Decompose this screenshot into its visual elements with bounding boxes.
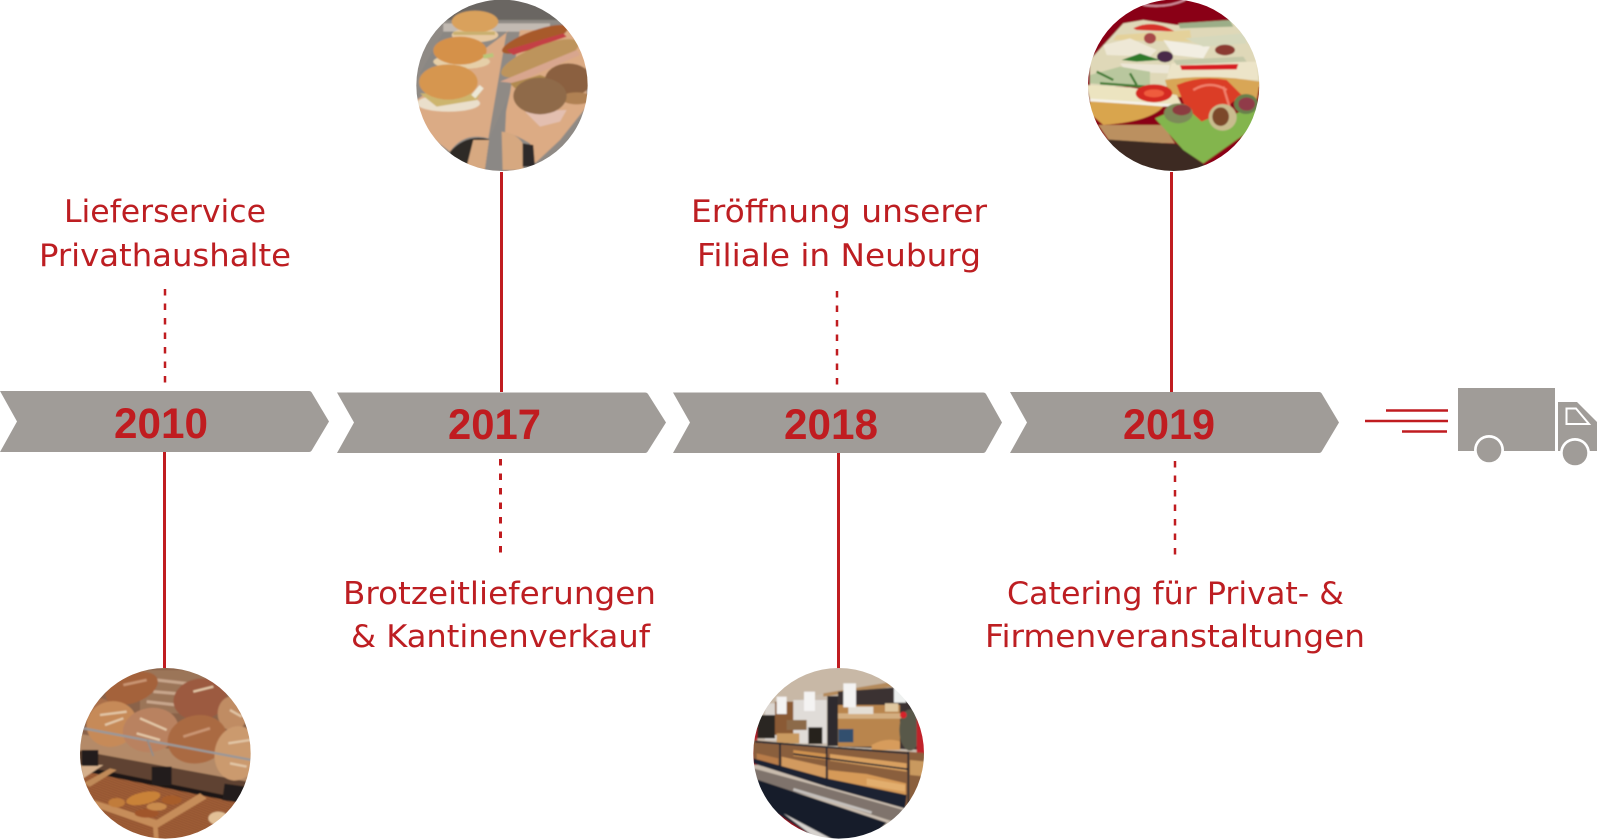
front wheel xyxy=(1560,438,1590,468)
text: Lieferservice Privathaushalte xyxy=(39,194,291,274)
connector: 2017 photo line xyxy=(500,172,503,392)
milestone arrow 2019 xyxy=(1010,392,1339,453)
truck cab xyxy=(1558,402,1597,451)
photo: bakery shop counter xyxy=(750,667,930,839)
milestone arrow 2019: 2019 xyxy=(1123,401,1215,449)
connector: 2010 dashed line xyxy=(164,289,166,385)
text: Catering für Privat- & Firmenveranstaltungen xyxy=(985,576,1365,655)
milestone arrow 2010: 2010 xyxy=(114,400,208,448)
milestone arrow 2017: 2017 xyxy=(448,401,541,449)
text: Lieferservice Privathaushalte: Lieferservice xyxy=(64,194,266,230)
photo: catering platter xyxy=(1088,0,1260,171)
speed lines xyxy=(1365,410,1448,432)
text: Brotzeitlieferungen & Kantinenverkauf: Brotzeitlieferungen xyxy=(343,576,656,612)
icon: delivery truck with speed lines xyxy=(1365,388,1597,468)
milestone arrow 2010 xyxy=(0,391,329,452)
cab window xyxy=(1566,408,1589,424)
text: Catering für Privat- & Firmenveranstaltungen: Catering für Privat- & xyxy=(1007,576,1344,612)
connector: 2018 dashed line xyxy=(836,291,838,385)
connector: 2017 dashed line xyxy=(499,459,502,555)
text: Brotzeitlieferungen & Kantinenverkauf xyxy=(343,576,656,655)
connector: 2018 photo line xyxy=(837,453,840,672)
rear wheel xyxy=(1474,435,1504,465)
connector: 2010 photo line xyxy=(163,452,166,668)
milestone arrow 2018: 2018 xyxy=(784,401,878,449)
text: Eröffnung unserer Filiale in Neuburg xyxy=(691,194,987,274)
text: Catering für Privat- & Firmenveranstaltungen: Firmenveranstaltungen xyxy=(985,619,1365,655)
connector: 2019 dashed line xyxy=(1174,461,1176,555)
photo: sandwiches on wooden boards xyxy=(413,0,593,177)
milestone arrow 2018 xyxy=(673,392,1002,453)
milestone arrow 2017 xyxy=(337,392,666,453)
connector: 2019 photo line xyxy=(1170,172,1173,392)
text: Eröffnung unserer Filiale in Neuburg: Eröffnung unserer xyxy=(691,194,987,230)
text: Brotzeitlieferungen & Kantinenverkauf: & Kantinenverkauf xyxy=(351,619,651,655)
truck box xyxy=(1458,388,1555,451)
photo: bread loaves on shelf xyxy=(80,668,251,839)
text: Lieferservice Privathaushalte: Privathaushalte xyxy=(39,238,291,274)
text: Eröffnung unserer Filiale in Neuburg: Filiale in Neuburg xyxy=(697,238,981,274)
